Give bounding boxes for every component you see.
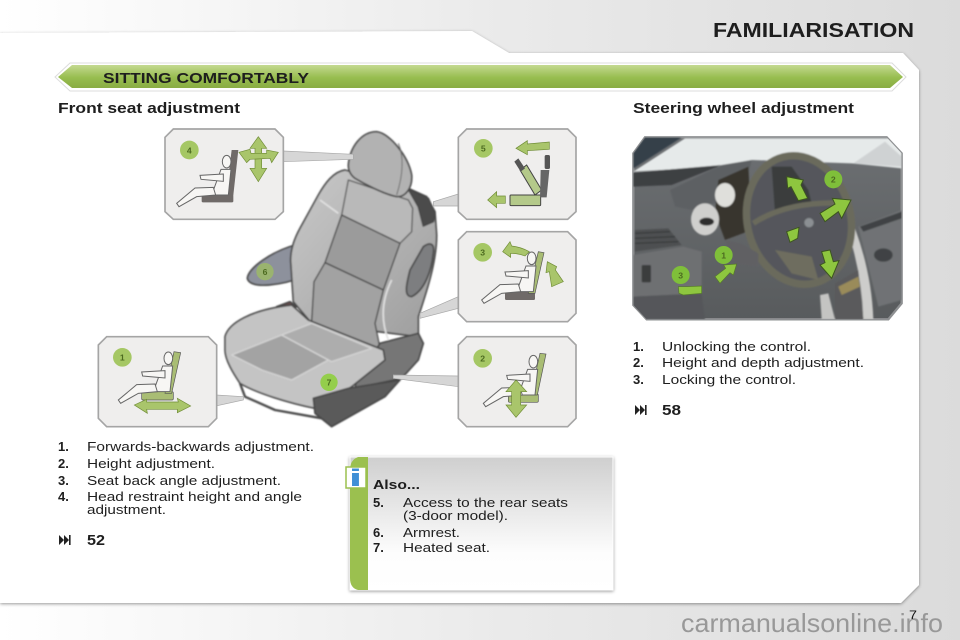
armrest [247, 244, 303, 285]
cushion [225, 305, 385, 408]
heading: front seat adjustment: Front seat adjustment [58, 100, 240, 117]
backrest base [291, 170, 437, 337]
number badge 7 [320, 374, 338, 391]
badge 3 [672, 266, 690, 284]
steering list: Height and depth adjustment. [662, 355, 864, 370]
title: FAMILIARISATION [713, 20, 914, 42]
badge 2 [824, 170, 842, 188]
panel 2: height adjustment: 2 [480, 354, 485, 364]
badge 1: 1 [721, 250, 726, 260]
badge 3: 3 [678, 270, 683, 280]
illustration: car seat [225, 132, 437, 427]
steering list: 3. [633, 372, 644, 387]
steering list [633, 339, 864, 387]
front seat list: adjustment. [87, 502, 166, 517]
centre console [835, 270, 863, 319]
number badge 6 [256, 263, 274, 280]
right side [858, 210, 902, 307]
info box: also: 5. [373, 495, 384, 510]
air vent and lower panel [635, 228, 682, 252]
front seat list: 3. [58, 473, 69, 488]
lower arrow 1 [715, 264, 737, 283]
steering list: 1. [633, 339, 644, 354]
panel 4: head restraint: 4 [187, 145, 192, 155]
front seat list [58, 439, 314, 517]
page reference 52: 52 [87, 532, 105, 549]
number badge 7: 7 [327, 378, 332, 388]
gauges [691, 203, 719, 235]
badge 1 [715, 246, 733, 264]
arrow small centre [787, 227, 799, 242]
lever [277, 302, 297, 312]
panel 5: rear seat access: 5 [481, 144, 486, 154]
side pocket [406, 244, 434, 297]
info box: also: Armrest. [403, 525, 460, 540]
arrow down [820, 250, 839, 278]
front dark box [313, 380, 400, 427]
info box: also: Heated seat. [403, 540, 490, 555]
watermark: carmanualsonline.info [681, 608, 943, 638]
panel 4: head restraint [165, 129, 283, 219]
panel 1: forwards-backwards [98, 337, 217, 427]
section banner: sitting comfortably [55, 63, 906, 91]
arrow up-right [820, 198, 851, 222]
page reference 58: 58 [662, 402, 681, 419]
panel 1: forwards-backwards: 1 [120, 353, 125, 363]
bolster seam [320, 200, 392, 340]
info box: also [346, 457, 613, 590]
info box: also: (3-door model). [403, 508, 508, 523]
section banner: sitting comfortably: SITTING COMFORTABLY [103, 70, 309, 87]
upper inset [342, 180, 413, 243]
steering wheel [750, 158, 848, 280]
steering wheel photo [633, 137, 902, 319]
dark shoulder [408, 189, 435, 226]
info box: also: 6. [373, 525, 384, 540]
front seat list: Seat back angle adjustment. [87, 473, 281, 488]
info box: also: Access to the rear seats [403, 495, 569, 510]
steering list: 2. [633, 355, 644, 370]
lower arrow 3 [678, 286, 702, 295]
panel 2: height adjustment [458, 337, 576, 427]
page reference 58 [635, 402, 681, 419]
heading: steering wheel adjustment: Steering wheel adjustment [633, 100, 854, 117]
middle mesh inset [325, 215, 400, 290]
front seat list: Height adjustment. [87, 456, 215, 471]
lower mesh inset [312, 263, 383, 348]
badge 2: 2 [831, 175, 836, 185]
front seat list: Head restraint height and angle [87, 489, 302, 504]
panel 3: seat back angle [458, 232, 576, 322]
rear mesh panel [282, 323, 372, 362]
front seat list: 1. [58, 439, 69, 454]
info box: also: i [348, 465, 362, 492]
steering list: Locking the control. [662, 372, 796, 387]
front seat list: 4. [58, 489, 69, 504]
panel 5: rear seat access [458, 129, 576, 219]
page reference 52 [59, 532, 105, 549]
front seat list: Forwards-backwards adjustment. [87, 439, 314, 454]
front seat list: 2. [58, 456, 69, 471]
seat diagram [98, 129, 576, 427]
page number: 7 [909, 608, 917, 622]
info box: also: Also... [373, 477, 420, 492]
panel 3: seat back angle: 3 [480, 248, 485, 258]
number badge 6: 6 [263, 267, 268, 277]
front mesh panel [232, 335, 328, 380]
windscreen [633, 138, 902, 172]
arrow up [787, 177, 808, 201]
steering list: Unlocking the control. [662, 339, 811, 354]
silver stalks [852, 228, 874, 320]
brow [670, 160, 752, 210]
leader lines [216, 151, 458, 406]
mechanism [355, 333, 423, 388]
headrest [348, 132, 412, 197]
info box: also: 7. [373, 540, 384, 555]
rail [240, 383, 322, 418]
